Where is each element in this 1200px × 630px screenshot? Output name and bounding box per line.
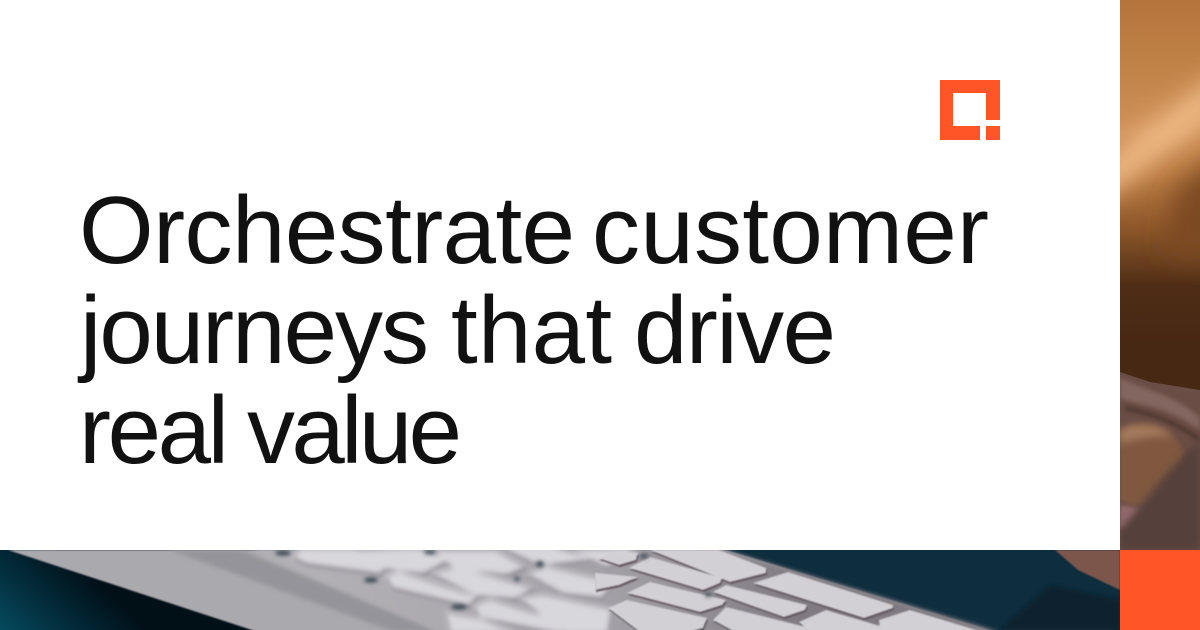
photo: skin corner xyxy=(1055,550,1120,590)
title: drive xyxy=(634,277,836,384)
gaps between keys xyxy=(275,550,711,610)
keyboard body ridge xyxy=(170,550,440,630)
title: that xyxy=(451,277,612,384)
panel: orange corner block xyxy=(1120,550,1200,630)
panel: right photo strip xyxy=(1120,0,1200,550)
photo: hand xyxy=(1120,372,1200,550)
title: journeys xyxy=(77,277,429,384)
photo: dark fabric left xyxy=(0,550,280,630)
photo highlight xyxy=(1120,72,1200,205)
key shadows right xyxy=(595,552,894,630)
blurred key shadows xyxy=(294,548,643,630)
title: customer xyxy=(592,177,989,284)
photo: fabric right xyxy=(700,550,1120,630)
title: Orchestrate xyxy=(79,177,575,284)
title: real xyxy=(79,377,229,484)
sharp keys right xyxy=(595,550,983,630)
title: value xyxy=(247,377,462,484)
keyboard body xyxy=(8,550,995,630)
keyboard well xyxy=(250,550,1000,630)
title xyxy=(77,177,989,484)
blurred keys left xyxy=(293,546,642,630)
icon: orange logo mark xyxy=(940,80,1000,140)
panel: bottom keyboard photo xyxy=(0,546,1120,630)
